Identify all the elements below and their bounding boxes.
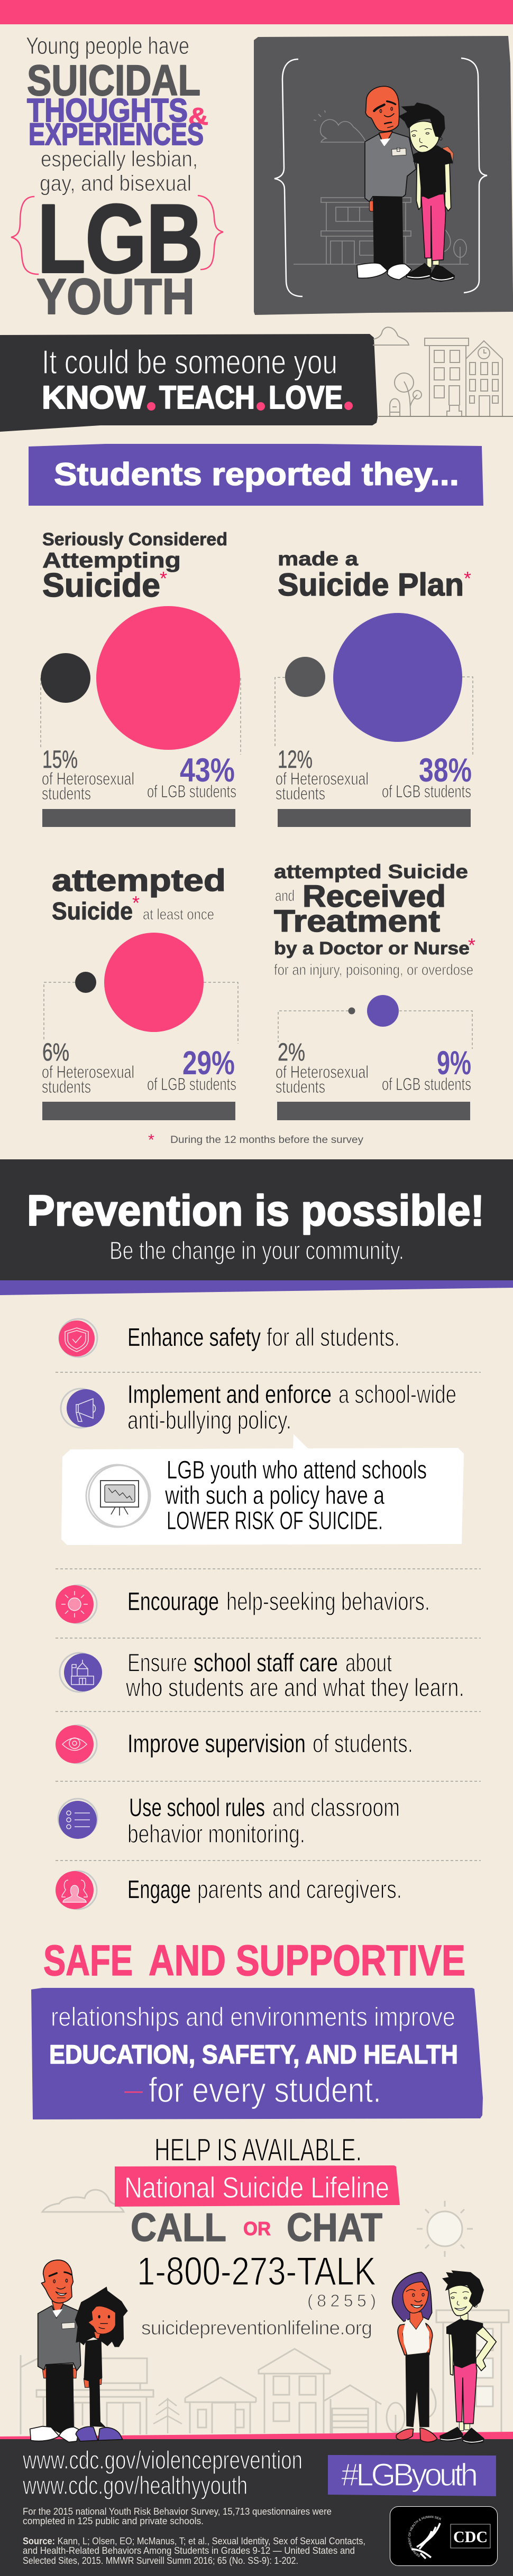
student's arms xyxy=(416,162,422,210)
man's head xyxy=(41,2260,73,2303)
student's black shirt xyxy=(414,145,453,199)
figure: adult man xyxy=(357,86,416,280)
woman's face details xyxy=(406,2289,427,2308)
phone number: 1-800-273-TALK xyxy=(137,2249,376,2293)
survey note: For the 2015 national Youth Risk Behavior Survey, 15,713 questionnaires were xyxy=(23,2506,332,2517)
word: or: OR xyxy=(243,2218,271,2239)
man's trousers xyxy=(373,197,404,271)
gray bar xyxy=(42,809,235,827)
dark panel background xyxy=(254,36,513,315)
list item: enhance safety xyxy=(59,1319,400,1357)
student's shoes xyxy=(440,2427,463,2441)
pink right brace xyxy=(198,196,223,269)
source citation: Source: Kann, L; Olsen, EO; McManus, T; et al., Sexual Identity, Sex of Sexual Contacts, xyxy=(23,2535,365,2546)
LGB percent: 38% xyxy=(419,752,472,789)
pink asterisk: * xyxy=(132,892,140,914)
title: youth: YOUTH xyxy=(36,268,195,325)
pink dash xyxy=(124,2091,143,2093)
stat heading xyxy=(274,861,470,959)
stat heading: Suicide xyxy=(52,897,133,925)
item text: Engage xyxy=(127,1876,191,1904)
girl's face xyxy=(88,2306,115,2334)
item text: Encourage xyxy=(127,1588,219,1616)
girl's hair xyxy=(75,2286,128,2347)
panel line 1: relationships and environments improve xyxy=(51,2002,455,2032)
list item: encourage help-seeking xyxy=(56,1585,430,1623)
LGB label: of LGB students xyxy=(382,782,471,801)
survey note xyxy=(23,2506,332,2526)
phone digits: (8255) xyxy=(307,2291,376,2310)
website links xyxy=(22,2447,303,2500)
LGB percent: 43% xyxy=(180,752,235,789)
man's white shoes xyxy=(357,263,387,278)
item text: school staff care xyxy=(194,1649,338,1677)
CDC logo xyxy=(451,2524,490,2548)
list item: school rules xyxy=(58,1794,400,1848)
dashed dividers xyxy=(56,1372,481,1861)
LGB circle xyxy=(333,613,462,742)
lifeline website: suicidepreventionlifeline.org xyxy=(141,2317,372,2339)
banner: students reported they xyxy=(29,444,483,506)
lifeline name: National Suicide Lifeline xyxy=(124,2171,389,2204)
heterosexual label: of Heterosexual xyxy=(276,769,369,788)
LGB label: of LGB students xyxy=(147,1074,236,1094)
student's face details xyxy=(451,2292,477,2310)
footnote xyxy=(148,1131,364,1149)
panel line 2: EDUCATION, SAFETY, AND HEALTH xyxy=(49,2040,458,2069)
word: know: KNOW xyxy=(42,379,145,415)
item text xyxy=(127,1876,402,1904)
panel: seriously considered attempting suicide xyxy=(41,529,241,827)
pink asterisk: * xyxy=(468,934,475,956)
dashed connectors xyxy=(41,678,241,755)
girl's hands xyxy=(84,2377,102,2387)
girl's purple shoes xyxy=(76,2426,98,2441)
panel: attempted suicide and received treatment xyxy=(274,861,475,1120)
banner heading: Students reported they... xyxy=(54,457,459,492)
item text xyxy=(127,1794,400,1848)
icon: school house xyxy=(60,1653,102,1692)
man's trousers xyxy=(46,2364,74,2433)
heterosexual label: of Heterosexual xyxy=(42,1062,134,1082)
heterosexual label xyxy=(42,1062,134,1096)
heterosexual label: students xyxy=(42,1077,91,1096)
woman's shoes xyxy=(396,2429,414,2440)
man's shoes xyxy=(30,2426,59,2441)
heterosexual percent: 6% xyxy=(42,1038,69,1066)
student's arms xyxy=(449,2332,453,2375)
stat heading: Suicide xyxy=(42,567,160,604)
item text xyxy=(127,1324,400,1352)
icon: shield xyxy=(59,1319,97,1357)
list item: improve supervision xyxy=(56,1725,413,1763)
sun xyxy=(417,2201,473,2257)
man's hands xyxy=(42,2368,77,2378)
footnote asterisk: * xyxy=(148,1131,154,1149)
student's neck xyxy=(461,2313,468,2321)
stat heading: made a xyxy=(278,548,359,570)
word: teach: TEACH xyxy=(159,379,255,415)
pink stripe xyxy=(0,2432,513,2441)
item text xyxy=(125,1649,464,1702)
man's face details xyxy=(374,101,396,128)
item text: a school-wide xyxy=(338,1381,456,1409)
connector word: and: and xyxy=(275,887,295,905)
stat heading: attempted xyxy=(52,863,226,898)
title: experiences: EXPERIENCES xyxy=(29,117,204,152)
callout text: with such a policy have a xyxy=(164,1482,384,1510)
purple banner shape xyxy=(29,444,483,506)
stat heading: attempted Suicide xyxy=(274,861,468,882)
student's head xyxy=(448,2285,474,2315)
callout: lower risk of suicide xyxy=(61,1434,464,1545)
figures: smiling woman and student xyxy=(392,2271,496,2444)
HHS eagle xyxy=(411,2523,440,2559)
subheading: for an injury: for an injury, poisoning, or overdose xyxy=(274,962,473,979)
title line: especially lesbian: especially lesbian, xyxy=(41,146,198,171)
band line: it could be someone you: It could be someone you xyxy=(42,343,337,381)
student's ankles xyxy=(459,2422,470,2431)
icon: megaphone xyxy=(61,1389,105,1428)
item text: anti-bullying policy. xyxy=(127,1407,291,1435)
student's pink trousers xyxy=(454,2363,477,2424)
cloud xyxy=(42,2190,124,2212)
dark footer xyxy=(0,2439,513,2576)
logos: HHS and CDC: CDC xyxy=(453,2527,488,2546)
white right brace xyxy=(461,58,487,293)
heterosexual circle xyxy=(348,1007,355,1015)
student's pink trousers xyxy=(422,194,446,261)
pink lifeline banner xyxy=(115,2165,400,2207)
help is available: HELP IS AVAILABLE. xyxy=(154,2132,362,2168)
LGB percent: 29% xyxy=(182,1045,235,1082)
name badge xyxy=(392,147,406,156)
purple strip xyxy=(0,1280,513,1295)
item text: Enhance safety xyxy=(127,1324,261,1352)
man's face details xyxy=(49,2272,71,2298)
item text xyxy=(127,1381,456,1435)
item text: of students. xyxy=(313,1730,413,1758)
line art: neighborhood xyxy=(21,2190,509,2434)
stat heading: Suicide Plan xyxy=(278,567,464,602)
icon: people xyxy=(56,1871,97,1909)
panel: illustration of adult comforting student xyxy=(254,36,513,315)
subheading: at least once: at least once xyxy=(143,906,214,923)
man's hand on shoulder xyxy=(443,146,453,164)
section subheading: Be the change in your community. xyxy=(109,1237,404,1265)
gray bar xyxy=(278,809,471,827)
LGB circle xyxy=(367,995,399,1027)
panel line 3: for every student. xyxy=(149,2070,381,2109)
purple panel shape xyxy=(31,1988,483,2119)
dark band xyxy=(0,1159,513,1280)
source citation: and Health-Related Behaviors Among Students in Grades 9-12 — United States and xyxy=(23,2545,355,2556)
girl's face details xyxy=(98,2315,110,2329)
background line art: cloud, school, trees xyxy=(294,110,469,264)
woman's neck xyxy=(410,2312,423,2329)
heterosexual percent: 12% xyxy=(278,745,313,773)
item text: Improve supervision xyxy=(127,1730,306,1758)
man's head xyxy=(365,86,399,132)
LGB circle xyxy=(104,933,204,1032)
item text: behavior monitoring. xyxy=(127,1820,305,1848)
student's head xyxy=(409,121,439,152)
woman's face xyxy=(403,2282,428,2313)
dashed connectors xyxy=(275,677,473,755)
line art: cloud and town houses xyxy=(373,327,513,416)
icon: presentation board xyxy=(86,1465,150,1527)
website links: www.cdc.gov/healthyyouth xyxy=(22,2472,248,2500)
man's neck xyxy=(379,131,392,146)
student's hair xyxy=(398,103,445,137)
stat heading xyxy=(278,548,464,602)
item text: Use school rules xyxy=(129,1794,265,1822)
heterosexual circle xyxy=(41,653,90,703)
dashed connectors xyxy=(44,982,238,1044)
panel: attempted suicide at least once xyxy=(42,863,238,1120)
stat heading xyxy=(42,529,227,604)
heterosexual percent: 2% xyxy=(278,1038,305,1066)
stat heading: Attempting xyxy=(42,548,181,572)
heterosexual label: of Heterosexual xyxy=(42,769,134,788)
student's face details xyxy=(411,128,442,147)
girl's neck xyxy=(94,2332,100,2338)
LGB percent: 9% xyxy=(437,1045,471,1082)
title line: young people have: Young people have xyxy=(26,32,189,59)
callout text: LOWER RISK OF SUICIDE. xyxy=(167,1507,383,1535)
item text: about xyxy=(345,1649,392,1677)
pink asterisk: * xyxy=(160,568,167,589)
heterosexual label: students xyxy=(276,784,325,803)
gray bar xyxy=(42,1102,235,1120)
woman's trousers xyxy=(406,2352,429,2427)
icon: eye xyxy=(56,1725,97,1763)
student's ankles xyxy=(427,257,439,267)
collar xyxy=(52,2309,62,2318)
icon: checklist xyxy=(58,1799,97,1839)
heterosexual circle xyxy=(285,657,325,697)
round trees xyxy=(387,2403,405,2432)
callout text: LGB youth who attend schools xyxy=(167,1456,427,1484)
helpline block xyxy=(115,2132,400,2339)
man's shirt collar xyxy=(380,138,390,146)
dark band shape xyxy=(0,334,378,432)
item text: help-seeking behaviors. xyxy=(226,1588,430,1616)
LGB circle xyxy=(96,606,240,750)
woman's blouse xyxy=(403,2319,429,2354)
student's shoes xyxy=(406,263,431,279)
heterosexual label xyxy=(276,769,369,803)
source citation xyxy=(23,2535,365,2566)
panel: made a suicide plan xyxy=(275,548,473,827)
LGB label: of LGB students xyxy=(382,1074,471,1094)
girl's black clothes xyxy=(84,2339,106,2427)
badge xyxy=(62,2322,75,2329)
logos: HHS and CDC: DEPARTMENT OF HEALTH & HUMAN SERVICES · USA xyxy=(408,2515,441,2558)
HHS seal ring text xyxy=(410,2518,441,2555)
hashtag box xyxy=(328,2455,496,2496)
man's hand xyxy=(369,201,374,211)
heterosexual circle xyxy=(75,972,96,993)
item text: Ensure xyxy=(127,1649,187,1677)
woman's hair xyxy=(392,2272,432,2321)
list item: implement and enforce xyxy=(61,1381,456,1435)
pink asterisk: * xyxy=(464,568,471,589)
survey note: completed in 125 public and private schools. xyxy=(23,2515,204,2526)
list item: engage parents xyxy=(56,1871,402,1909)
icon: sun xyxy=(56,1585,97,1623)
item text: Implement and enforce xyxy=(127,1381,332,1409)
word: safe: SAFE xyxy=(43,1937,133,1985)
stat heading: Received xyxy=(303,879,446,914)
heterosexual label xyxy=(42,769,134,803)
pine tree xyxy=(153,2398,182,2433)
heterosexual label: students xyxy=(42,784,91,803)
heterosexual percent: 15% xyxy=(42,745,78,773)
title: thoughts: THOUGHTS xyxy=(27,92,188,129)
figures: smiling man and girl xyxy=(30,2260,128,2442)
gray bar xyxy=(277,1102,470,1120)
callout band: it could be someone you know, teach, love xyxy=(0,334,378,432)
word: chat: CHAT xyxy=(287,2205,382,2249)
stat heading: by a Doctor or Nurse xyxy=(274,938,470,959)
footer stripe and background xyxy=(0,2432,513,2576)
student's shirt xyxy=(446,2319,483,2368)
man's neck xyxy=(52,2301,63,2318)
item text xyxy=(127,1588,430,1616)
callout text xyxy=(164,1456,427,1535)
heading: safe and supportive xyxy=(43,1937,465,1985)
word: love: LOVE xyxy=(269,379,343,415)
white speech bubble xyxy=(61,1434,464,1545)
houses xyxy=(185,2377,256,2433)
section heading: Prevention is possible! xyxy=(27,1187,484,1235)
website links: www.cdc.gov/violenceprevention xyxy=(22,2447,303,2475)
pink left brace xyxy=(11,197,39,274)
item text: and classroom xyxy=(272,1794,400,1822)
source citation: Selected Sites, 2015. MMWR Surveill Summ 2016; 65 (No. SS-9): 1-202. xyxy=(23,2555,298,2566)
man's sweater xyxy=(38,2304,81,2371)
stat heading: Seriously Considered xyxy=(42,529,227,550)
LGB label: of LGB students xyxy=(147,782,236,801)
man's sweater xyxy=(365,132,416,202)
title line: gay and bisexual: gay, and bisexual xyxy=(40,171,191,196)
title block xyxy=(11,32,223,325)
student's hair xyxy=(442,2271,484,2308)
section band: prevention is possible xyxy=(0,1159,513,1295)
heterosexual label: students xyxy=(276,1077,325,1096)
title: suicidal: SUICIDAL xyxy=(27,57,200,105)
top pink bar xyxy=(0,0,513,24)
panel: relationships and environments xyxy=(31,1988,483,2119)
heterosexual label xyxy=(276,1062,369,1096)
list item: ensure school staff care xyxy=(60,1649,464,1702)
title: ampersand: & xyxy=(188,103,208,130)
white left brace xyxy=(274,59,303,296)
title: LGB: LGB xyxy=(38,184,203,293)
heterosexual label: of Heterosexual xyxy=(276,1062,369,1082)
stat heading xyxy=(52,863,226,925)
footnote text: During the 12 months before the survey xyxy=(170,1134,364,1146)
item text: for all students. xyxy=(267,1324,400,1352)
dashed connectors xyxy=(278,1011,472,1049)
hashtag box: #LGByouth xyxy=(341,2457,478,2493)
word: call: CALL xyxy=(131,2205,226,2249)
stat heading: Treatment xyxy=(274,904,440,938)
woman's arms xyxy=(398,2324,407,2355)
left shops xyxy=(21,2355,153,2434)
right building xyxy=(436,2310,509,2432)
item text: parents and caregivers. xyxy=(197,1876,402,1904)
figure: sad student xyxy=(398,103,454,282)
pink dots xyxy=(147,402,353,411)
